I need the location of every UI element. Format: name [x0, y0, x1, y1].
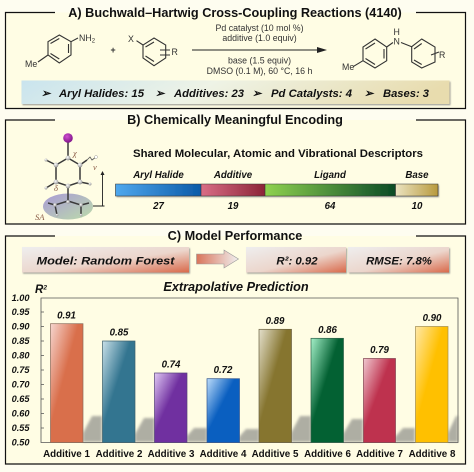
bar: Additive 1: 0.91 [57, 310, 76, 322]
box: RMSE [348, 247, 449, 272]
y axis labels: 0.60 [12, 408, 30, 418]
structure: product: H [394, 27, 400, 37]
reaction conditions: DMSO (0.1 M), 60 °C, 16 h [207, 66, 312, 76]
heading B: B) Chemically Meaningful Encoding [127, 113, 343, 127]
segmented descriptor bar: Aryl Halide [132, 170, 184, 181]
bar: Additive 2: Additive 2 [96, 449, 143, 460]
bar: Additive 8 [409, 313, 456, 460]
structure: aryl halide: R [172, 47, 178, 57]
bar shadows [83, 416, 458, 442]
segmented descriptor bar: Additive [213, 170, 253, 181]
molecule model: SA [35, 212, 45, 222]
plot frame [41, 298, 458, 442]
segmented descriptor bar: Base [405, 170, 429, 181]
structure: product: R [439, 50, 445, 60]
y axis title: R [35, 284, 43, 296]
descriptors heading: Shared Molecular, Atomic and Vibrational Descriptors [133, 148, 423, 160]
molecule model: δ [54, 183, 59, 193]
bar: Additive 6 [304, 325, 351, 460]
bar: Additive 7: Additive 7 [356, 449, 403, 460]
bar: Additive 5 [252, 316, 299, 460]
molecule model: ν [93, 162, 97, 172]
surface area ellipse [43, 194, 93, 220]
reaction conditions [207, 23, 312, 76]
y axis title: 2 [42, 284, 47, 292]
structure: aryl halide: X [128, 34, 134, 44]
panel C: model performance [6, 229, 466, 464]
structure: aryl halide [128, 34, 178, 66]
structure: p-toluidine: 2 [92, 38, 96, 44]
molecule model: χ [72, 148, 77, 158]
box: model: Model: Random Forest [36, 256, 176, 268]
segmented descriptor bar: 10 [412, 201, 423, 212]
segmented descriptor bar: 27 [152, 201, 164, 212]
y axis labels: 0.80 [12, 350, 30, 360]
y axis labels: 0.95 [12, 307, 30, 317]
y axis labels: 0.75 [12, 365, 30, 375]
bar: Additive 8: 0.90 [423, 313, 442, 324]
stats band: ➢ [252, 88, 263, 100]
bar: Additive 3: Additive 3 [148, 449, 195, 460]
bar: Additive 5: 0.89 [266, 316, 285, 327]
segmented descriptor bar [116, 170, 438, 212]
y axis labels: 0.65 [12, 394, 30, 404]
molecule model [35, 133, 98, 222]
segmented descriptor bar: 19 [228, 201, 239, 212]
stats band: Additives: 23 [173, 88, 245, 100]
structure: p-toluidine [25, 33, 96, 69]
structure: product: N [394, 36, 400, 46]
segmented descriptor bar: Ligand [314, 170, 347, 181]
y axis labels: 0.90 [12, 322, 30, 332]
stats band: ➢ [41, 88, 52, 100]
structure: p-toluidine: NH [79, 33, 92, 43]
bar: Additive 5: Additive 5 [252, 449, 299, 460]
box: model [22, 247, 189, 272]
segmented descriptor bar: 64 [325, 201, 336, 212]
reaction conditions: Pd catalyst (10 mol %) [216, 23, 304, 33]
bar: Additive 2: 0.85 [110, 328, 129, 338]
plus sign: + [110, 45, 116, 55]
bar: Additive 4: Additive 4 [200, 449, 247, 460]
chart title: Extrapolative Prediction [163, 280, 309, 294]
reaction arrow [192, 47, 327, 53]
bar chart [12, 284, 458, 460]
bar: Additive 3 [148, 360, 195, 460]
panel B: encoding [6, 113, 466, 224]
bar: Additive 4 [200, 365, 247, 460]
bar: Additive 1: Additive 1 [43, 449, 90, 460]
reaction conditions: additive (1.0 equiv) [222, 33, 297, 43]
panel A: reaction [6, 6, 466, 108]
bar: Additive 7: 0.79 [370, 345, 390, 356]
heading C: C) Model Performance [168, 229, 302, 243]
stats band: Pd Catalysts: 4 [271, 88, 353, 100]
stats band: ➢ [155, 88, 166, 100]
structure: product [342, 27, 445, 72]
box: R squared: R²: 0.92 [276, 256, 318, 268]
structure: product: Me [342, 62, 354, 72]
y axis labels: 0.55 [12, 423, 30, 433]
stats band: Bases: 3 [383, 88, 430, 100]
stats band [22, 80, 450, 104]
y axis labels: 0.85 [12, 336, 30, 346]
bar: Additive 4: 0.72 [214, 365, 233, 376]
correlation arrow [93, 171, 104, 206]
bar: Additive 1 [43, 310, 90, 460]
arrow: model to metrics [196, 250, 238, 268]
bar: Additive 6: Additive 6 [304, 449, 351, 460]
heading A: A) Buchwald–Hartwig Cross-Coupling Reactions (4140) [68, 6, 402, 20]
stats band: ➢ [364, 88, 375, 100]
y axis labels: 0.70 [12, 380, 30, 390]
reaction conditions: base (1.5 equiv) [228, 56, 291, 66]
bar: Additive 6: 0.86 [318, 325, 338, 336]
bar: Additive 8: Additive 8 [409, 449, 456, 460]
structure: p-toluidine: Me [25, 59, 37, 69]
y axis labels: 1.00 [12, 293, 30, 303]
bar: Additive 2 [96, 328, 143, 460]
bar: Additive 7 [356, 345, 403, 460]
y axis labels [12, 293, 30, 448]
bar: Additive 3: 0.74 [162, 360, 181, 370]
box: R squared [246, 247, 346, 272]
box: RMSE: RMSE: 7.8% [366, 256, 432, 268]
stats band: Aryl Halides: 15 [58, 88, 145, 100]
y axis labels: 0.50 [12, 438, 30, 448]
